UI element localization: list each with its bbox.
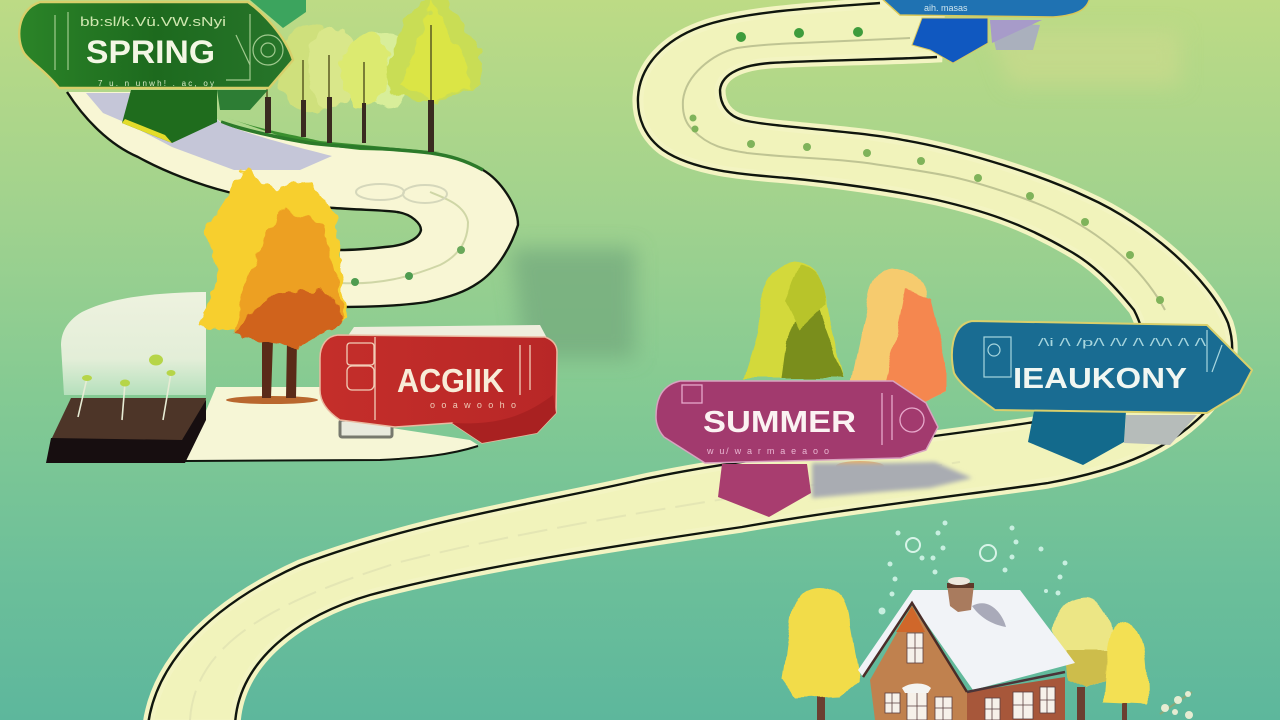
autumn label bbox=[320, 325, 557, 443]
blue label title: IEAUKONY bbox=[1013, 363, 1187, 395]
seedlings along the road bbox=[690, 27, 1164, 304]
seedling soil bed bbox=[46, 354, 206, 463]
spring trees bbox=[250, 0, 483, 152]
spring top scribble text: bb:sl/k.Vü.VW.sNyi bbox=[80, 14, 226, 29]
blue label: right bbox=[952, 321, 1252, 465]
blue label: top bbox=[880, 0, 1090, 63]
flowering bush bbox=[1160, 691, 1193, 719]
autumn tree bbox=[198, 168, 348, 404]
house windows bbox=[885, 633, 1055, 720]
spring title: SPRING bbox=[86, 34, 215, 70]
blue label small text: /\i /\ /p/\ /\/ /\ /\/\ /\ /\ bbox=[1038, 337, 1208, 349]
spring bottom text: 7 u. n unwh! . ac, oy bbox=[98, 79, 214, 88]
top label small text: aih. masas bbox=[924, 3, 968, 13]
autumn platform and road bbox=[61, 292, 478, 461]
house bubbles bbox=[878, 520, 1068, 614]
summer small text: w u/ w a r m a e a o o bbox=[706, 446, 829, 456]
spring label bbox=[19, 2, 293, 143]
road: spring road bbox=[67, 92, 518, 307]
summer label bbox=[656, 381, 972, 517]
summer trees bbox=[744, 262, 946, 471]
soft shadows bbox=[510, 30, 1180, 358]
autumn title: ACGIIK bbox=[397, 362, 504, 399]
house trees bbox=[782, 587, 1148, 720]
autumn small text: o o a w o o h o bbox=[430, 400, 516, 410]
summer title: SUMMER bbox=[703, 404, 856, 439]
house bbox=[858, 577, 1075, 720]
